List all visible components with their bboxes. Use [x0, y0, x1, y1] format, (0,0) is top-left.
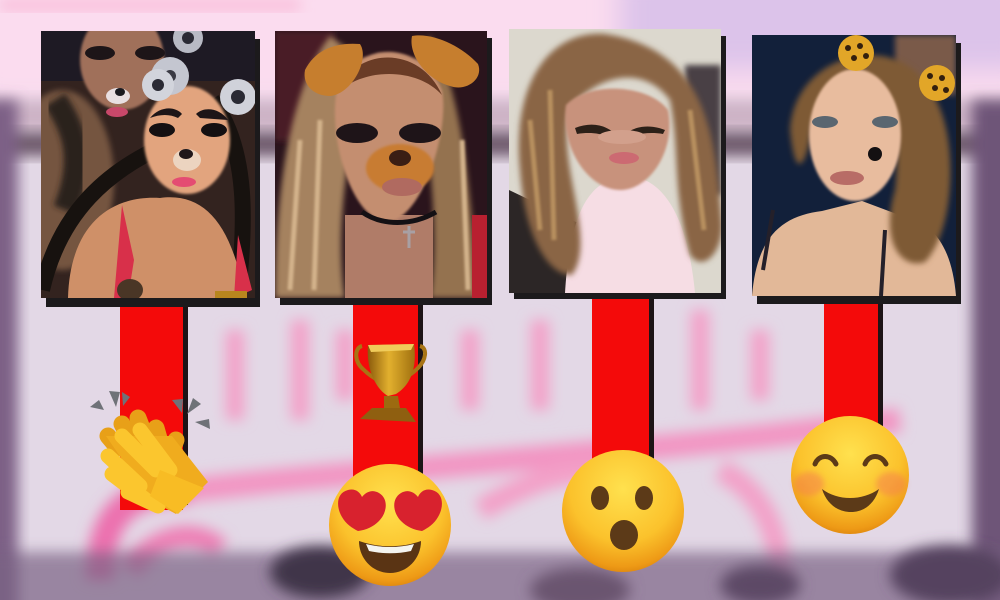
photo shadow 3 — [514, 36, 726, 299]
photo shadow 2 — [280, 38, 492, 305]
photo shadow 4 — [757, 43, 961, 304]
photo 1 with bear filter and bar — [41, 31, 260, 510]
photo 2 — [275, 31, 487, 300]
photo 3 — [509, 29, 722, 293]
photo shadow 1 — [46, 39, 260, 307]
icon: surprised face emoji — [562, 450, 684, 572]
bar 4 — [824, 296, 883, 428]
photo 1 — [41, 31, 255, 298]
photo 4 with leopard filter and bar — [752, 35, 961, 428]
icon: smiling face emoji — [791, 416, 909, 534]
bar 2 — [353, 298, 423, 485]
bar 3 — [592, 293, 654, 465]
icon: heart eyes emoji — [329, 464, 451, 586]
bar 1 — [120, 298, 188, 510]
photo 4 — [752, 35, 956, 296]
icon: clapping hands emoji — [90, 391, 210, 514]
icon: trophy emoji — [356, 344, 425, 422]
photo 2 with dog filter and bar — [275, 31, 492, 485]
photo 3 with face-swap filter and bar — [509, 29, 726, 465]
